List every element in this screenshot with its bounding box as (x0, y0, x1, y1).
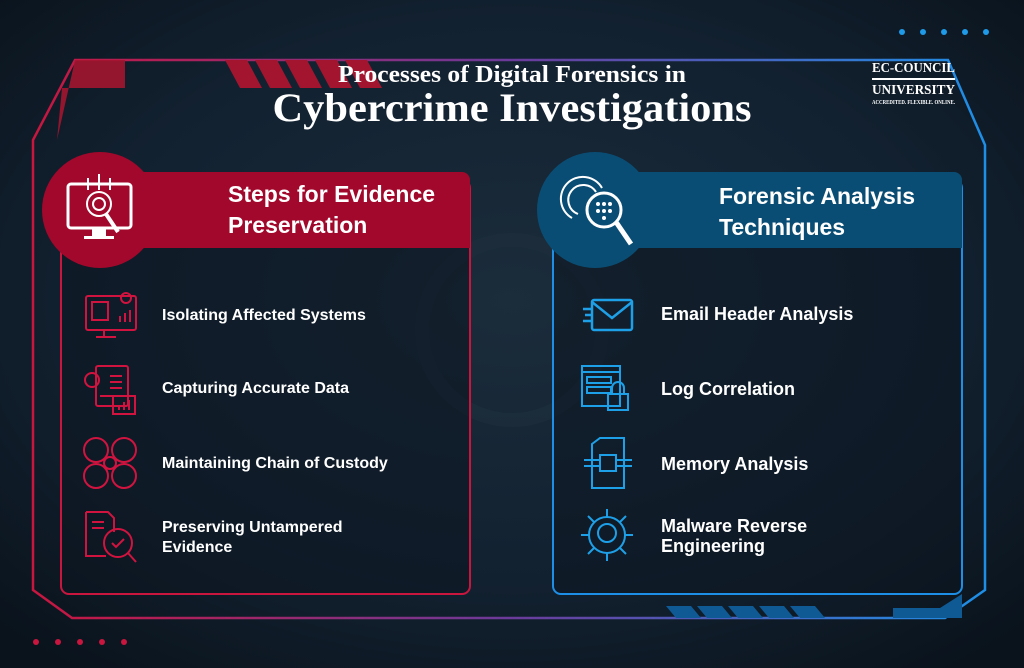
item: malware reverse engineering (581, 509, 807, 561)
item: memory analysis: Memory Analysis (661, 454, 808, 474)
item: isolating affected systems: Isolating Affected Systems (162, 307, 366, 324)
logo (872, 61, 955, 106)
logo: ACCREDITED. FLEXIBLE. ONLINE. (872, 100, 955, 106)
panel: forensic analysis techniques (537, 152, 962, 594)
dots: bottom left (33, 639, 127, 645)
header: steps for evidence preservation: Preservation (228, 212, 367, 238)
item: maintaining chain of custody: Maintaining Chain of Custody (162, 455, 388, 472)
item: email header analysis: Email Header Analysis (661, 304, 853, 324)
header: forensic analysis techniques: Forensic Analysis (719, 183, 915, 209)
header: forensic analysis techniques: Techniques (719, 214, 845, 240)
icon: monitor fingerprint circle (42, 152, 158, 268)
title: Processes of Digital Forensics in (338, 62, 686, 88)
item: maintaining chain of custody (84, 438, 388, 488)
item: log correlation: Log Correlation (661, 379, 795, 399)
item: capturing accurate data (85, 366, 349, 414)
item: email header analysis (583, 300, 853, 330)
item: capturing accurate data: Capturing Accurate Data (162, 380, 349, 397)
logo: UNIVERSITY (872, 83, 955, 98)
item: preserving untampered evidence: Evidence (162, 539, 232, 556)
outer frame (33, 60, 985, 618)
title: Cybercrime Investigations (272, 85, 752, 130)
title (272, 62, 752, 130)
logo: EC-COUNCIL (872, 61, 955, 76)
header: forensic analysis techniques (620, 172, 962, 248)
panel: evidence preservation (42, 152, 470, 594)
item: malware reverse engineering: Engineering (661, 536, 765, 556)
item: memory analysis (584, 438, 808, 488)
item: malware reverse engineering: Malware Reverse (661, 516, 807, 536)
header: steps for evidence preservation (140, 172, 470, 248)
item: preserving untampered evidence (86, 512, 343, 562)
header: steps for evidence preservation: Steps for Evidence (228, 181, 435, 207)
item: isolating affected systems (86, 293, 366, 337)
item: log correlation (582, 366, 795, 410)
dots: top right (899, 29, 989, 35)
icon: fingerprint magnifier circle (537, 152, 653, 268)
item: preserving untampered evidence: Preserving Untampered (162, 519, 343, 536)
